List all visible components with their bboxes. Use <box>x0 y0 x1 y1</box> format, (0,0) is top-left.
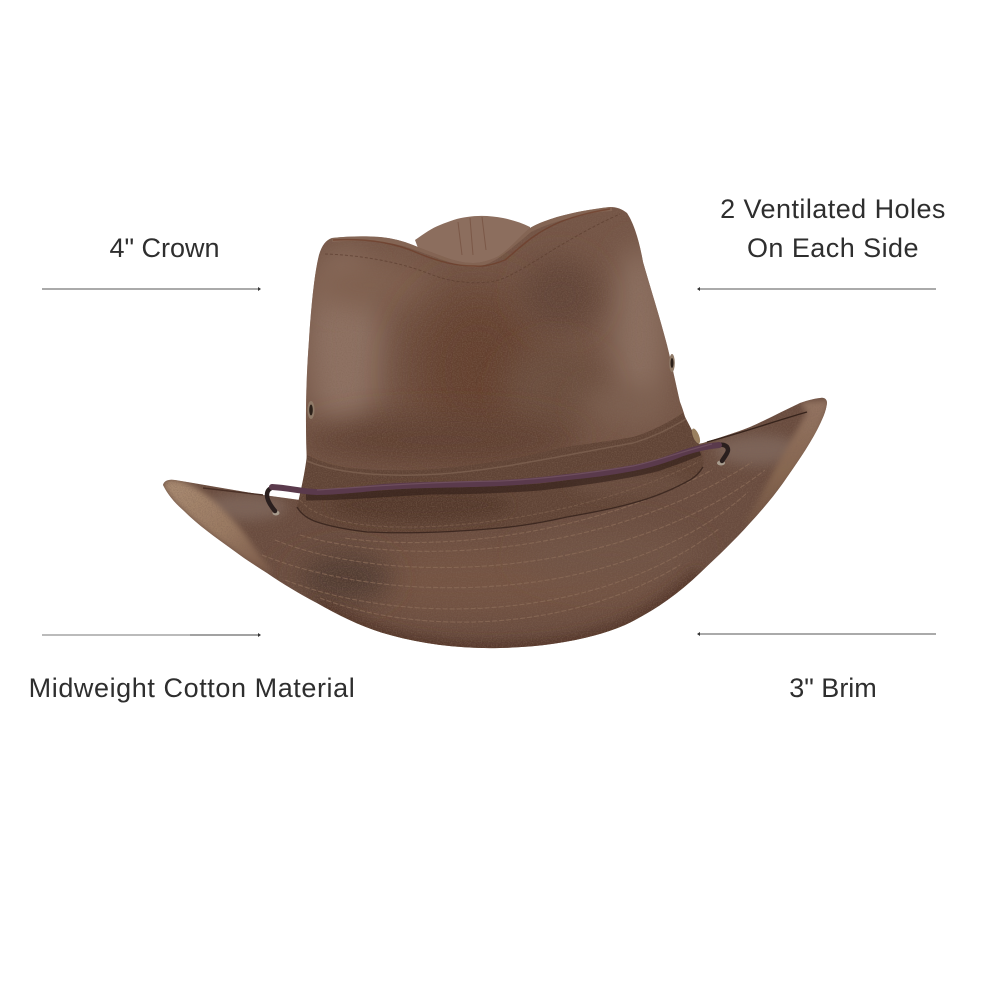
label: ventilated holes: On Each Side <box>747 233 919 263</box>
arrow: ventilated holes <box>697 287 936 291</box>
label: brim: 3" Brim <box>789 673 877 703</box>
hat back crown <box>415 216 530 280</box>
arrow: brim <box>697 632 936 636</box>
label: material: Midweight Cotton Material <box>29 673 355 703</box>
noise texture <box>300 205 700 470</box>
arrow: crown <box>42 287 261 291</box>
band lower edge <box>297 467 703 533</box>
label: 4 inch crown: 4" Crown <box>109 233 220 263</box>
hat cord <box>267 444 728 516</box>
left rim highlight <box>163 480 275 574</box>
hat brim <box>160 395 830 650</box>
hat crown <box>306 207 686 470</box>
arrow: material <box>42 633 261 637</box>
crown stitching <box>325 214 620 283</box>
label: ventilated holes: 2 Ventilated Holes <box>720 194 946 224</box>
crown rim fold <box>332 208 612 264</box>
crown seam <box>333 209 610 266</box>
label: ventilated holes <box>720 194 946 263</box>
rivet <box>690 427 702 445</box>
noise texture <box>295 410 707 535</box>
hat illustration <box>163 207 827 648</box>
left vent hole <box>308 401 314 419</box>
right vent hole <box>669 354 675 372</box>
hat band <box>295 410 707 535</box>
right rim highlight <box>744 400 830 524</box>
noise texture <box>160 395 830 650</box>
brim stitching <box>262 462 765 622</box>
